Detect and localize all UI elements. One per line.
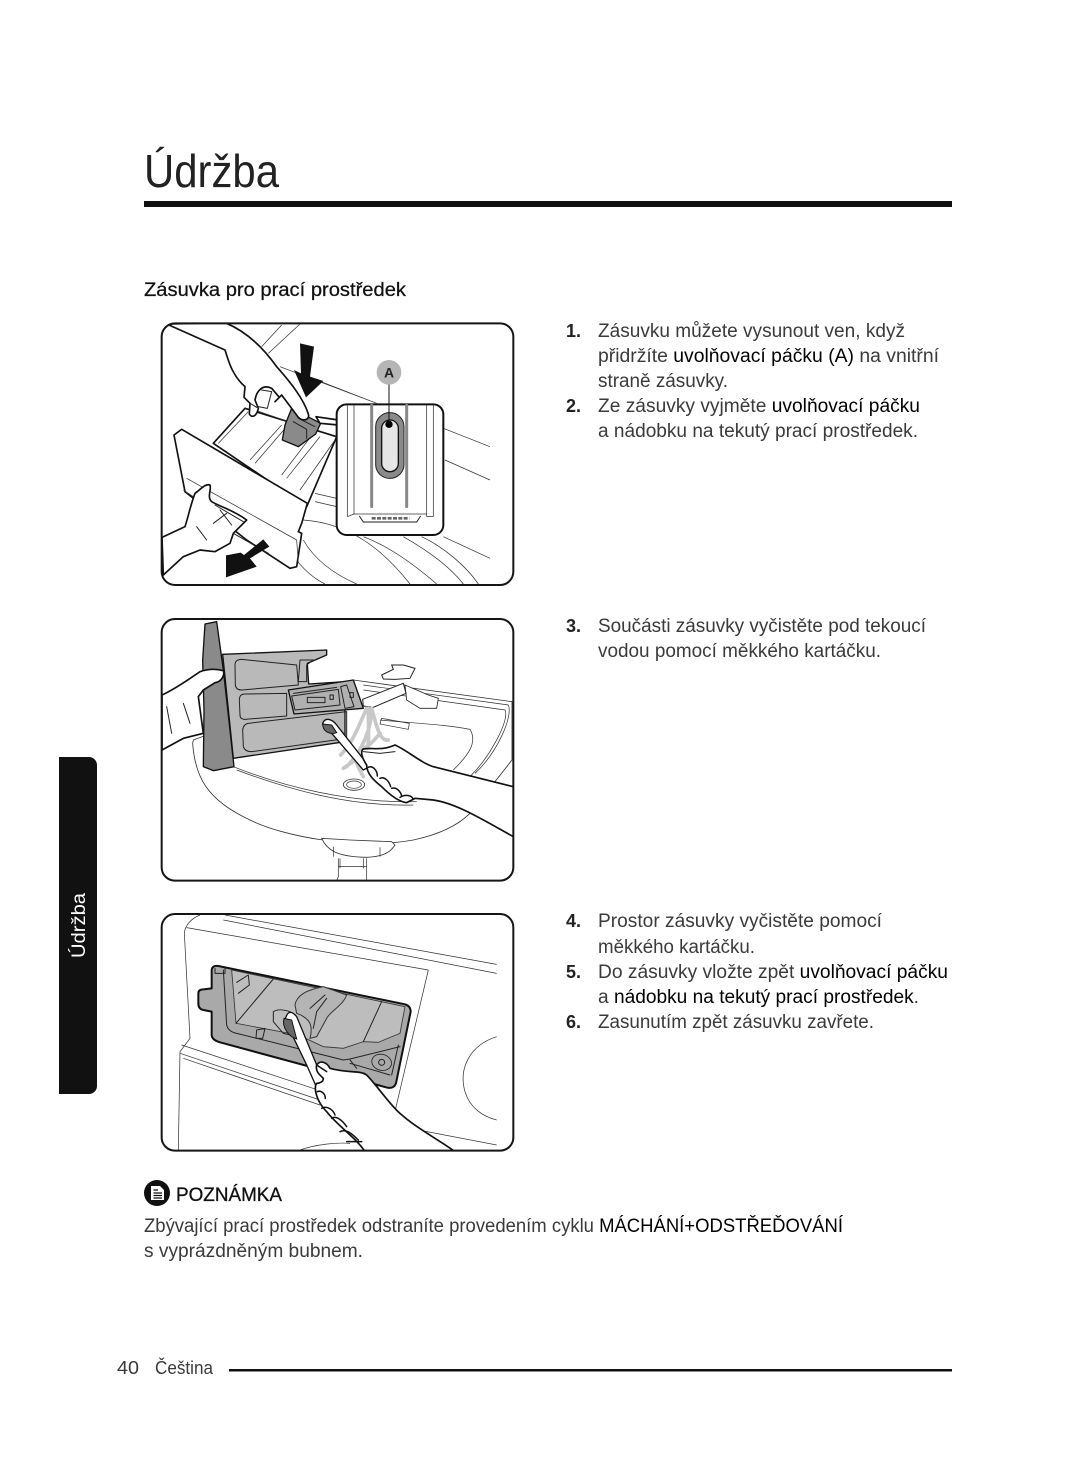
panel frame [162, 619, 513, 881]
release lever A oval [376, 413, 404, 478]
sink [193, 680, 512, 843]
step 2: a nádobku na tekutý prací prostředek. [598, 421, 918, 442]
step 2 [566, 396, 920, 442]
step 1: Zásuvku můžete vysunout ven, když [598, 321, 905, 342]
step 2: 2. [566, 396, 581, 416]
footer page number and language [117, 1357, 214, 1378]
step 5: 5. [566, 962, 581, 982]
pedestal [322, 838, 395, 857]
step 5: a nádobku na tekutý prací prostředek. [598, 987, 919, 1008]
step 3: Součásti zásuvky vyčistěte pod tekoucí [598, 616, 927, 637]
drawer front panel [174, 429, 307, 568]
footer page number and language: 40 [117, 1358, 139, 1378]
inner flap [295, 987, 347, 1038]
drain [343, 779, 365, 790]
step 6: Zasunutím zpět zásuvku zavřete. [598, 1012, 874, 1033]
upper hand [167, 323, 309, 420]
arrow: pull out [226, 539, 269, 577]
drawer body [223, 650, 345, 758]
step 4: měkkého kartáčku. [598, 937, 755, 958]
panel frame [162, 914, 513, 1151]
release lever clip [282, 408, 321, 447]
callout A [377, 360, 401, 385]
step 3: vodou pomocí měkkého kartáčku. [598, 641, 881, 662]
title: Údržba [144, 145, 279, 197]
liquid detergent container [288, 680, 363, 714]
step 5: Do zásuvky vložte zpět uvolňovací páčku [598, 962, 948, 983]
left hand [162, 669, 224, 750]
title rule [144, 201, 952, 207]
drawer body [213, 408, 337, 507]
illustration panel: cleaning parts under tap [162, 619, 513, 881]
callout A: A [384, 364, 394, 380]
lower hand [162, 485, 247, 575]
illustration panel: cleaning the drawer recess [162, 914, 513, 1152]
step 1 [566, 321, 940, 392]
step 4 [566, 911, 883, 958]
step 1: 1. [566, 321, 581, 341]
step 1: straně zásuvky. [598, 371, 728, 392]
side tab [59, 757, 97, 1094]
toothbrush [323, 719, 369, 770]
footer page number and language: Čeština [155, 1357, 214, 1378]
step 1: přidržíte uvolňovací páčku (A) na vnitřní [598, 346, 940, 367]
connector into inset [316, 417, 338, 425]
step 3 [566, 616, 927, 662]
recess screw [371, 1054, 392, 1071]
icon: note [144, 1180, 170, 1206]
hand [315, 1062, 455, 1152]
drawer recess [198, 966, 411, 1088]
note text: s vyprázdněným bubnem. [144, 1241, 363, 1262]
step 4: Prostor zásuvky vyčistěte pomocí [598, 911, 883, 932]
front panel of drawer [203, 622, 234, 771]
toothbrush [283, 1012, 317, 1086]
note text: Zbývající prací prostředek odstraníte provedením cyklu MÁCHÁNÍ+ODSTŘEĎOVÁNÍ [144, 1215, 844, 1237]
water stream [341, 708, 388, 777]
machine lines [178, 915, 497, 1150]
step 4: 4. [566, 911, 581, 931]
step 2: Ze zásuvky vyjměte uvolňovací páčku [598, 396, 920, 417]
right hand [362, 745, 513, 837]
arrow: push down [294, 343, 323, 397]
note heading: POZNÁMKA [176, 1185, 282, 1206]
step 5 [566, 962, 948, 1008]
panel frame [162, 323, 513, 585]
illustration panel: pulling out the drawer [162, 323, 513, 585]
step 6: 6. [566, 1012, 581, 1032]
faucet [363, 665, 438, 708]
section heading: Zásuvka pro prací prostředek [144, 280, 407, 301]
footer rule [229, 1369, 952, 1372]
side tab label: Údržba [68, 893, 90, 958]
inset: lever close-up [337, 384, 443, 535]
note text [144, 1215, 844, 1262]
step 3: 3. [566, 616, 581, 636]
